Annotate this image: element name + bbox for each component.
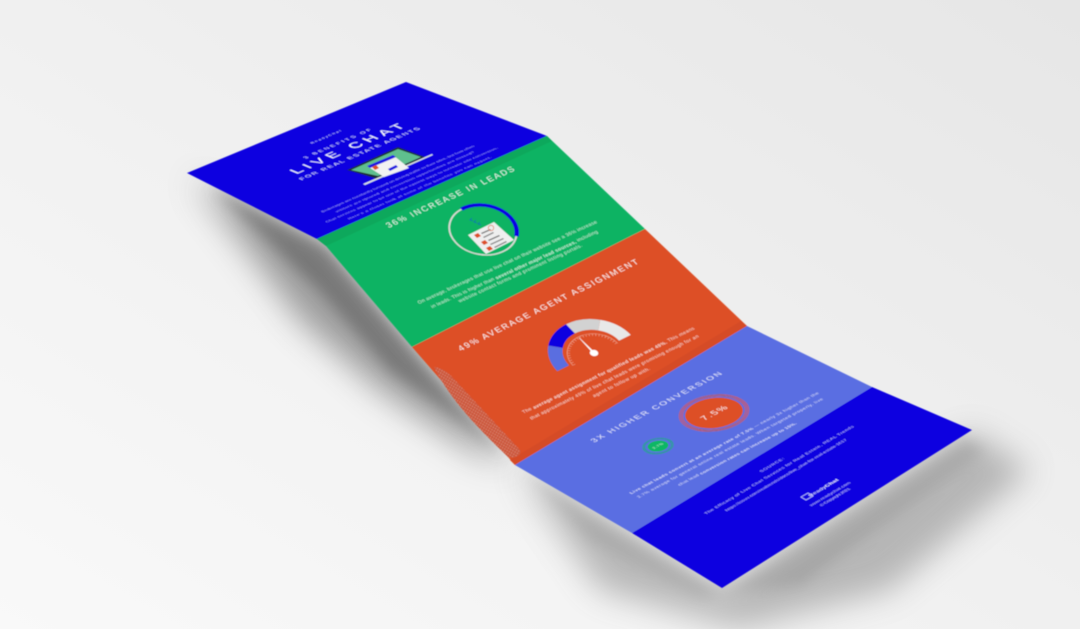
panel: source footer: [632, 387, 972, 588]
large 7.5% bubble: [665, 387, 763, 439]
paragraph: On average, brokerages that use live chat on their website see a 36% increase: [416, 220, 599, 305]
donut chart with card: [436, 196, 530, 264]
heading: 3 benefits of: 3 BENEFITS OF: [302, 128, 374, 159]
gauge segment: blue: [540, 324, 581, 352]
panel: 49% average agent assignment: [412, 229, 747, 465]
gauge segment: light gray: [592, 315, 631, 344]
folded infographic: [187, 82, 972, 588]
gauge chart: [529, 306, 633, 374]
shadow: lower edge tight: [520, 436, 985, 597]
intro paragraph: Chat services appear to be one of the easiest ways to increase site conversion.: [325, 147, 499, 223]
intro paragraph: Here's a closer look at some of the benefits you can expect.: [347, 156, 493, 220]
intro paragraph: Brokerages are constantly focused on driving traffic to their sites, but how often: [320, 145, 476, 213]
icon: laptop: [347, 147, 433, 185]
heading: 49% AVERAGE AGENT ASSIGNMENT: [455, 257, 641, 353]
shadow: lower edge: [515, 432, 1030, 629]
icon: signal chevrons: [470, 218, 481, 225]
icon: lead list card: [468, 222, 514, 254]
copyright: © Copyright 2021: [818, 487, 852, 507]
paragraph: Live chat leads convert at an average rate of 7.5% — nearly 3x higher than the: [628, 391, 821, 494]
dotted fold texture: [434, 367, 520, 458]
paragraph: The average agent assignment for qualified leads was 49%. This means: [521, 326, 697, 415]
paragraph: in leads. This is higher than several other major lead sources, including: [430, 230, 600, 310]
gauge segment: gray: [566, 311, 607, 339]
paragraph: that approximately 49% of live chat leads were promising enough for an: [529, 334, 701, 421]
small 2.7% bubble: [637, 435, 679, 457]
source citation: The Efficacy of Live Chat Services for Real Estate, REAL Trends: [703, 425, 856, 515]
gauge dial ticks: [556, 326, 618, 365]
gauge segment: periwinkle: [538, 341, 576, 371]
paragraph: website contact forms and prominent listing portals.: [457, 243, 584, 304]
heading: for real estate agents: FOR REAL ESTATE AGENTS: [298, 127, 422, 181]
heading: 3X HIGHER CONVERSION: [588, 371, 724, 443]
intro paragraph: visitors are ignored and conversion opportunities are missed?: [334, 151, 476, 213]
website: www.readychat.com: [808, 481, 852, 507]
panel: intro header: [187, 82, 547, 239]
logo wordmark: ReadyChat: [310, 130, 342, 144]
heading: live chat: LIVE CHAT: [287, 122, 409, 176]
panel: 3x higher conversion: [515, 326, 872, 533]
heading: 36% INCREASE IN LEADS: [383, 164, 517, 229]
footer logo: ReadyChat: [807, 478, 841, 498]
value: 2.7%: 2.7%: [652, 442, 665, 449]
gauge needle: [576, 336, 600, 357]
paragraph: agent to follow up with.: [591, 367, 652, 399]
paragraph: chat lead conversion rates can increase up to 15%.: [676, 422, 798, 486]
source label: SOURCE:: [758, 457, 786, 473]
panel: 36% increase in leads: [317, 136, 645, 347]
source url: https://issuu.com/realtrends/docs/live_chat-for-real-estate-1617: [724, 438, 849, 512]
shadow: left fold: [192, 178, 512, 466]
value: 7.5%: 7.5%: [698, 404, 730, 422]
paragraph: 2.7% average for general online real estate leads. When targeted properly, live: [636, 397, 825, 498]
shadow: fold tip: [210, 186, 505, 458]
